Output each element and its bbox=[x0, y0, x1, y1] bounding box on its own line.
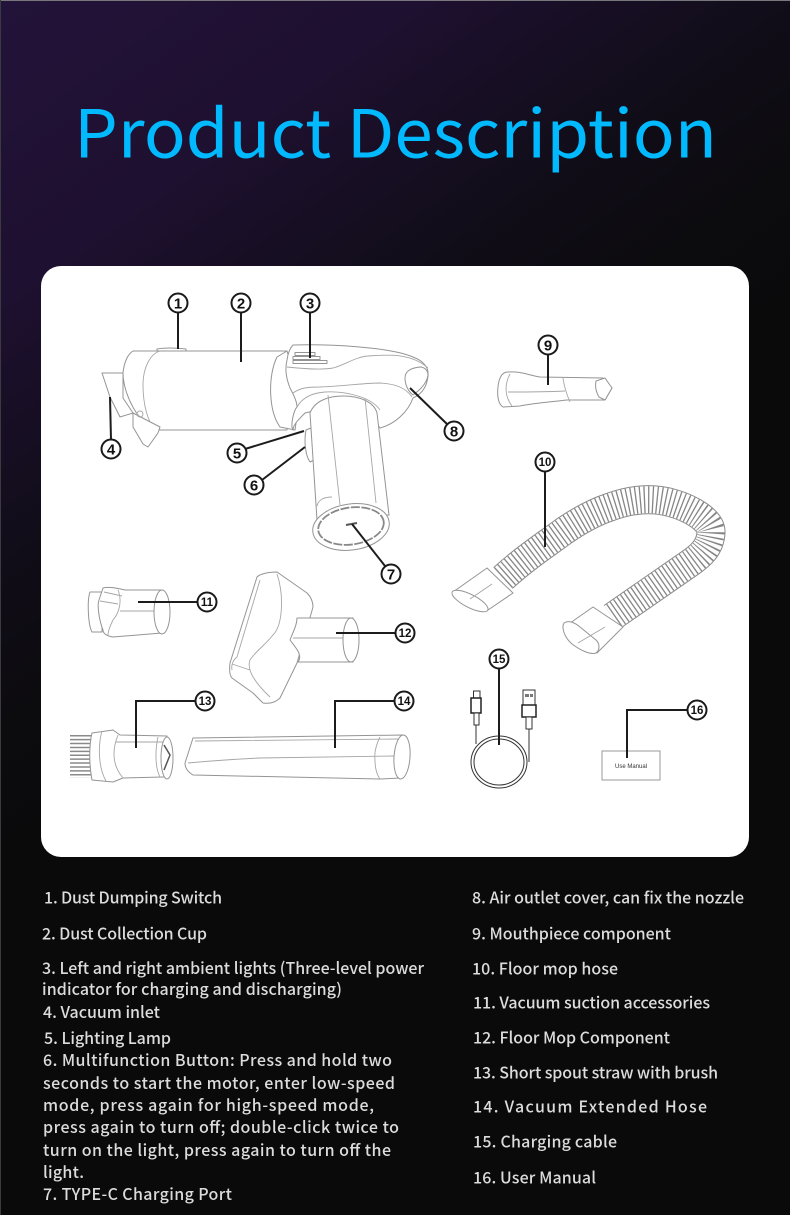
text block: parts list left column: mode, press again for high-speed mode, bbox=[43, 1092, 374, 1116]
callout numbers: 6 bbox=[250, 478, 258, 494]
callout numbers: 15 bbox=[493, 654, 506, 666]
illustration: floor mop component bbox=[230, 572, 359, 703]
text block: parts list right column bbox=[472, 884, 744, 1188]
illustration: extended hose bbox=[185, 734, 412, 780]
text block: parts list left column: 6. Multifunction Button: Press and hold two bbox=[43, 1047, 392, 1071]
text block: parts list left column: press again to turn off; double-click twice to bbox=[43, 1114, 399, 1138]
callout numbers: 14 bbox=[398, 696, 411, 708]
text block: parts list left column: indicator for charging and discharging) bbox=[42, 976, 342, 1000]
callout numbers: 2 bbox=[237, 296, 245, 312]
callout numbers: 5 bbox=[233, 446, 241, 462]
illustration: handheld vacuum bbox=[102, 345, 428, 555]
illustration: brush straw bbox=[81, 730, 173, 782]
title: Product Description bbox=[74, 82, 717, 178]
callout numbers: 1 bbox=[174, 296, 182, 312]
callout numbers: 9 bbox=[544, 338, 552, 354]
text block: parts list left column: 5. Lighting Lamp bbox=[44, 1025, 171, 1049]
callout numbers: 3 bbox=[306, 296, 314, 312]
callout numbers: 7 bbox=[387, 566, 395, 584]
callout numbers: 4 bbox=[107, 442, 116, 458]
text block: parts list left column bbox=[42, 884, 424, 1205]
callout numbers: 11 bbox=[201, 597, 214, 609]
callout numbers bbox=[102, 294, 706, 720]
illustration: use manual bbox=[602, 751, 660, 780]
callout numbers: 16 bbox=[691, 705, 703, 717]
text block: parts list left column: light. bbox=[43, 1159, 84, 1183]
callout numbers: 12 bbox=[399, 628, 411, 640]
text block: parts list right column: 13. Short spout straw with brush bbox=[473, 1060, 718, 1084]
text block: parts list right column: 9. Mouthpiece component bbox=[472, 920, 672, 944]
panel: parts diagram bbox=[41, 266, 749, 857]
text block: parts list left column: 1. Dust Dumping Switch bbox=[44, 884, 222, 908]
illustration: charging cable bbox=[471, 690, 536, 788]
callout numbers: 8 bbox=[450, 424, 458, 440]
illustration: mouthpiece bbox=[498, 372, 612, 407]
text block: parts list right column: 12. Floor Mop Component bbox=[473, 1024, 671, 1048]
text block: parts list left column: turn on the light, press again to turn off the bbox=[43, 1137, 391, 1161]
illustration: floor mop hose bbox=[449, 500, 711, 653]
text block: parts list right column: 10. Floor mop hose bbox=[472, 956, 618, 980]
illustration: use manual: Use Manual bbox=[615, 764, 647, 770]
text block: parts list left column: seconds to start the motor, enter low-speed bbox=[43, 1070, 395, 1094]
text block: parts list right column: 14. Vacuum Extended Hose bbox=[473, 1094, 707, 1118]
illustration: vacuum suction accessory bbox=[88, 587, 170, 637]
text block: parts list right column: 8. Air outlet cover, can fix the nozzle bbox=[472, 884, 744, 908]
text block: parts list left column: 2. Dust Collection Cup bbox=[42, 920, 207, 944]
text block: parts list left column: 7. TYPE-C Charging Port bbox=[43, 1181, 233, 1205]
callout numbers: 10 bbox=[539, 457, 551, 469]
text block: parts list right column: 15. Charging cable bbox=[473, 1128, 617, 1152]
text block: parts list left column: 4. Vacuum inlet bbox=[43, 999, 161, 1023]
text block: parts list right column: 11. Vacuum suction accessories bbox=[473, 990, 710, 1014]
leader lines bbox=[110, 312, 688, 758]
callout numbers: 13 bbox=[199, 696, 211, 708]
text block: parts list right column: 16. User Manual bbox=[473, 1164, 596, 1188]
text block: parts list left column: 3. Left and right ambient lights (Three-level power bbox=[42, 955, 424, 979]
